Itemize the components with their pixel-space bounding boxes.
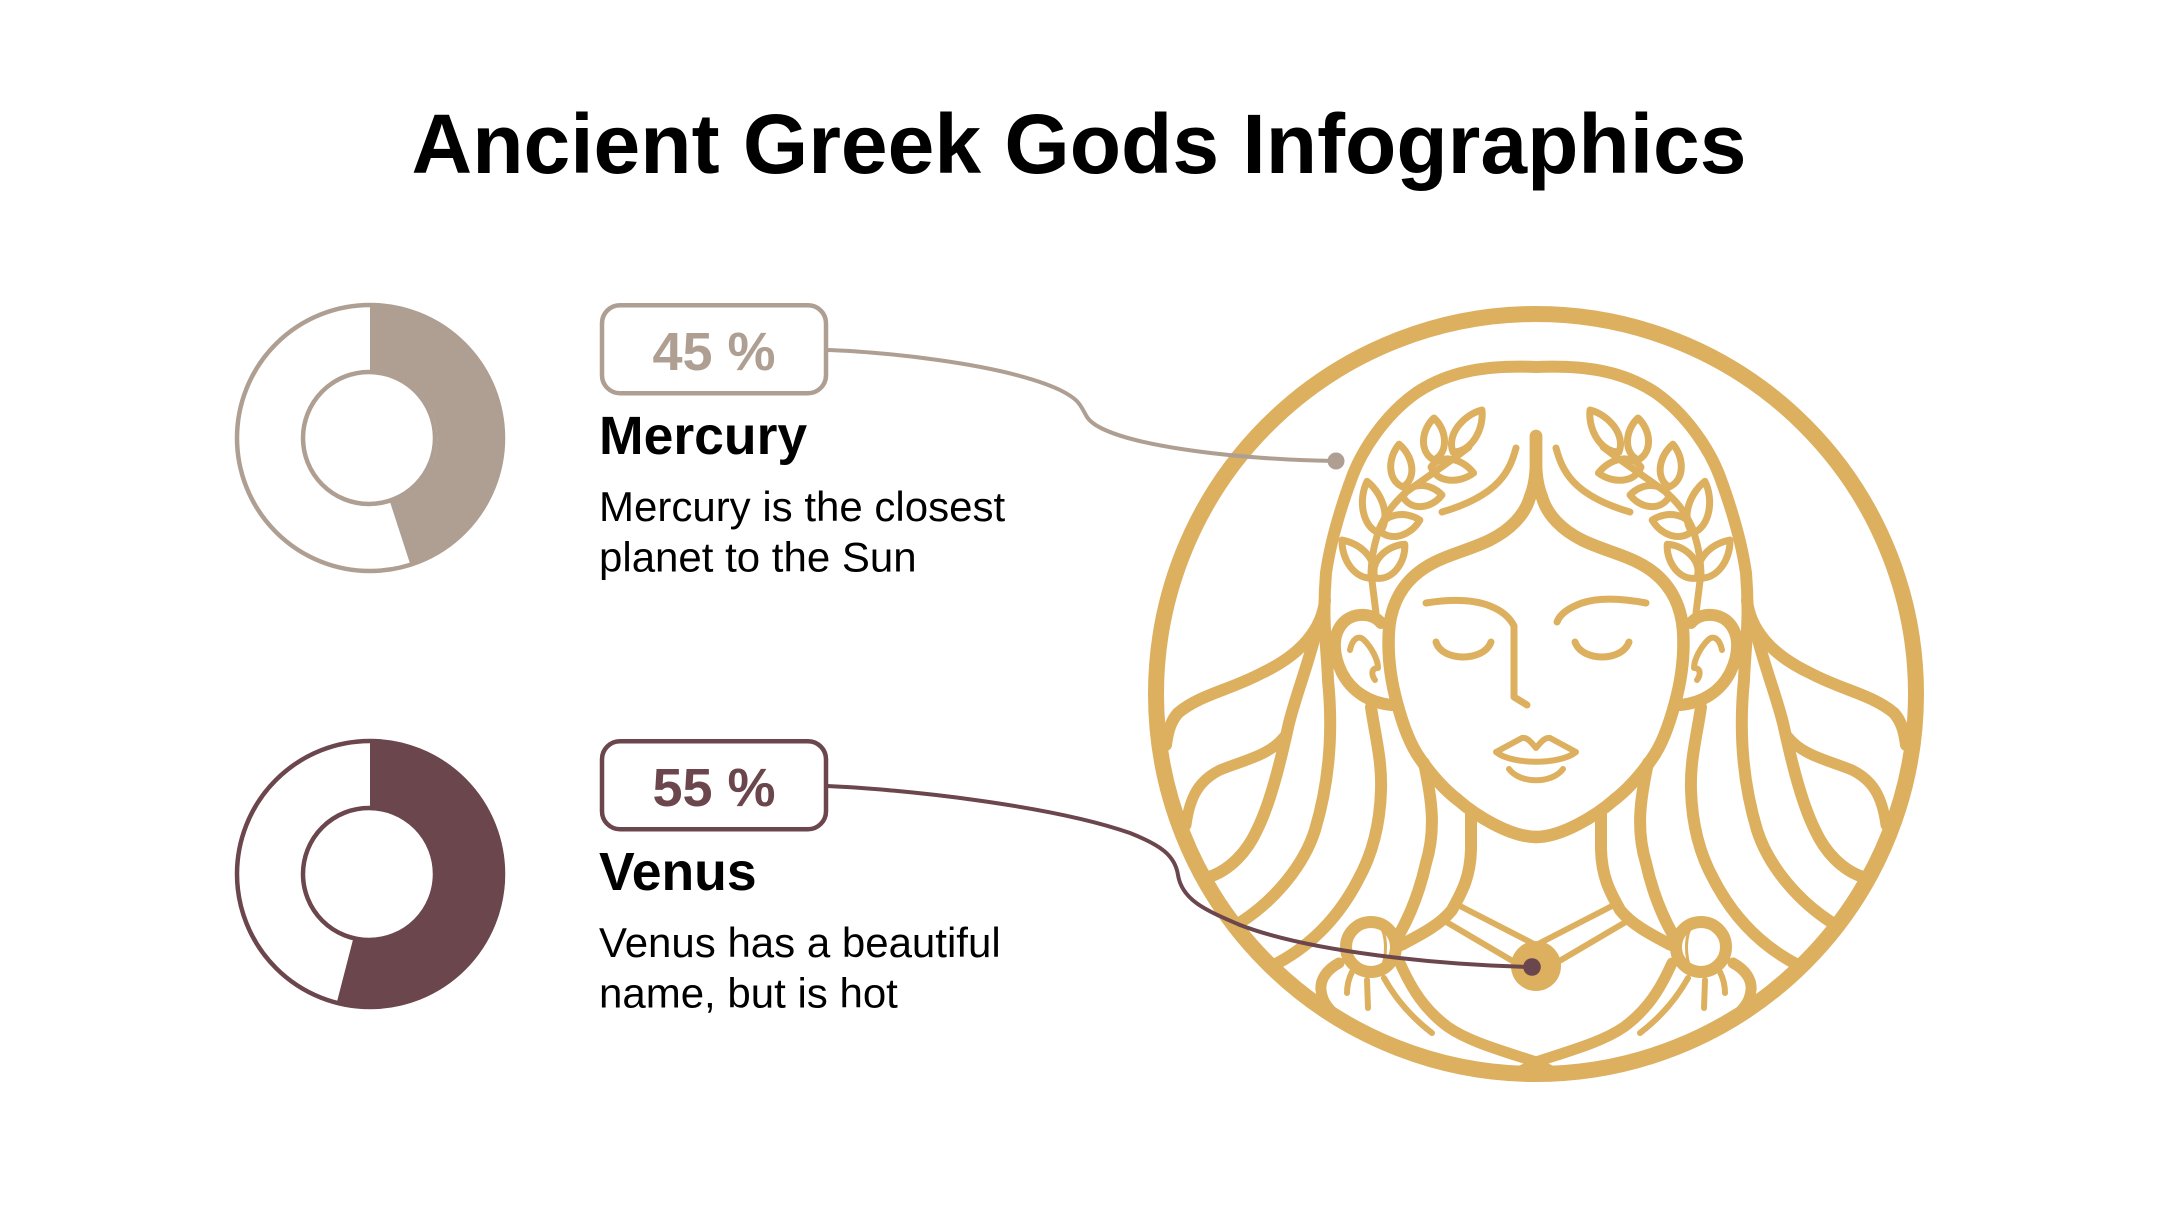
garment neckline — [1400, 963, 1536, 1062]
callout: Venus percentage — [602, 741, 826, 829]
ear — [1335, 615, 1392, 705]
shoulder drape — [1321, 963, 1339, 1015]
callout: Mercury percentage: 45 % — [652, 322, 776, 382]
lips — [1496, 738, 1576, 762]
text block: Venus description: Venus has a beautiful — [599, 919, 1001, 966]
text block: Venus description: name, but is hot — [599, 970, 898, 1016]
medallion ring — [1156, 314, 1916, 1074]
text block: Mercury description: planet to the Sun — [599, 534, 917, 580]
heading: Mercury: Mercury — [599, 407, 807, 466]
laurel leaves — [1334, 404, 1491, 585]
brows and nose — [1426, 600, 1527, 705]
donut chart: Mercury 45% — [237, 303, 505, 571]
donut chart: Venus 55% — [237, 739, 505, 1009]
drape folds — [1347, 972, 1432, 1033]
bottom joint — [1516, 1058, 1556, 1067]
hair outline — [1241, 367, 1536, 922]
text block: Mercury description: Mercury is the closest — [599, 483, 1005, 530]
connector: Venus — [827, 786, 1541, 976]
closed eyes — [1436, 642, 1491, 657]
callout: Mercury percentage — [602, 305, 826, 393]
laurel stem — [1371, 447, 1469, 613]
left half of figure — [1166, 367, 1536, 1062]
hairline and jaw — [1389, 436, 1536, 837]
shoulder brooch — [1346, 922, 1396, 972]
connector: Mercury — [827, 350, 1344, 470]
icon: goddess portrait in circle — [1156, 314, 1916, 1074]
heading: Venus: Venus — [599, 843, 757, 902]
mirrored right half — [1536, 367, 1906, 1062]
hair locks — [1166, 600, 1325, 745]
title: Ancient Greek Gods Infographics — [412, 97, 1746, 191]
necklace chains — [1448, 905, 1532, 963]
callout: Venus percentage: 55 % — [652, 758, 776, 818]
pendant — [1511, 941, 1561, 991]
inner hair strand — [1442, 448, 1516, 512]
